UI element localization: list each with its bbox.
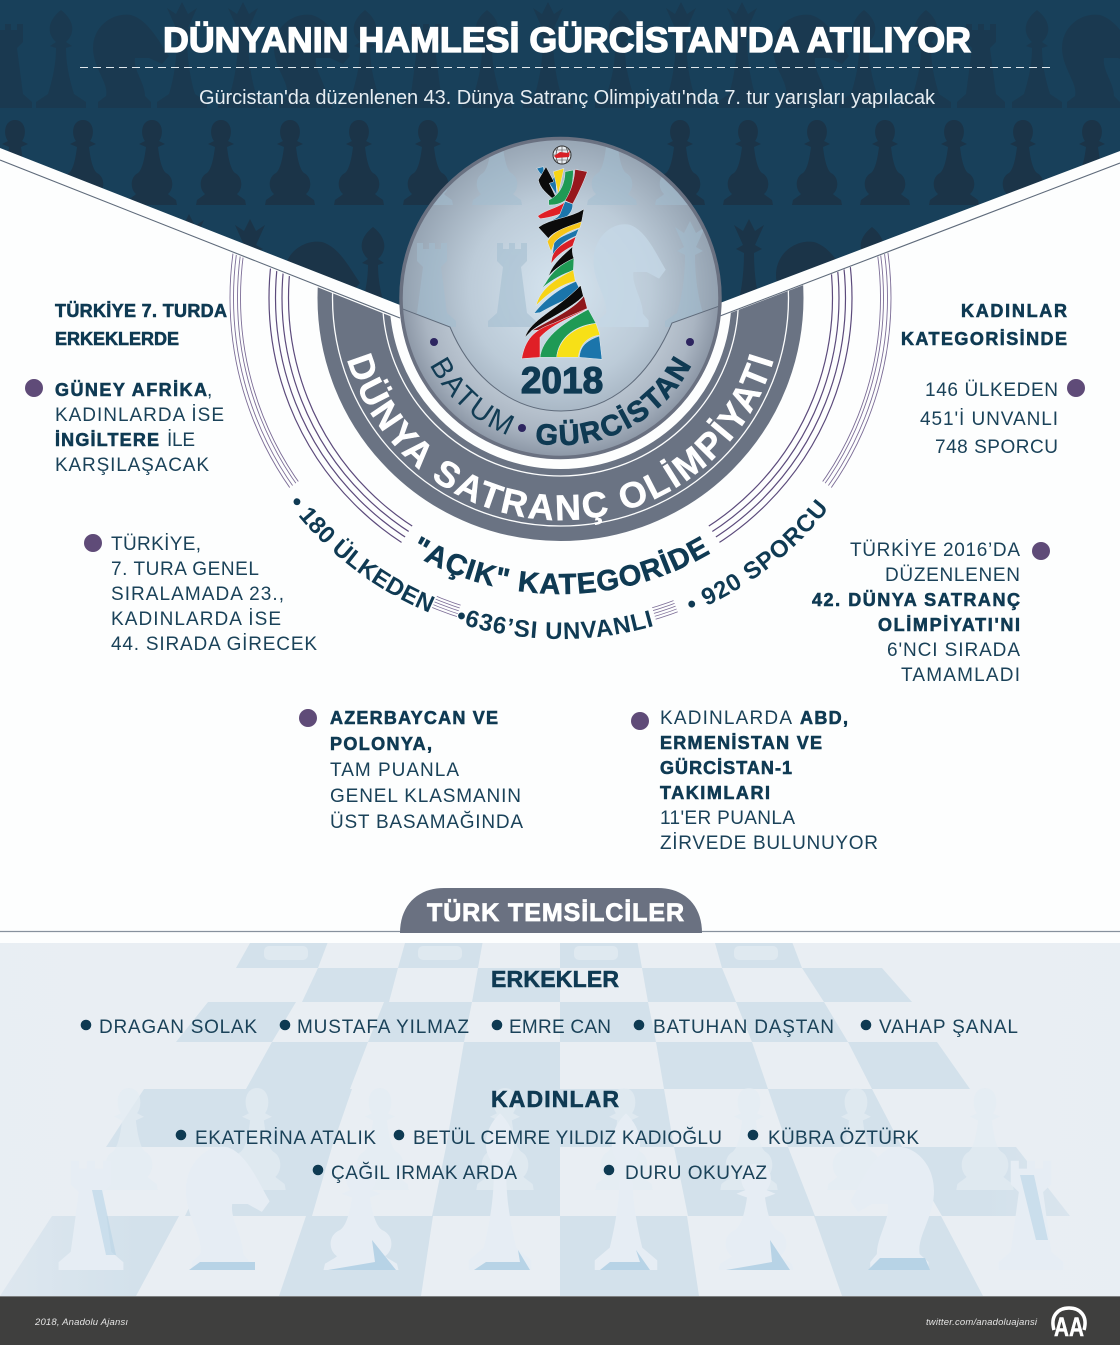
icon: ribbon queen [522,167,602,359]
note: Türkiye 23: TÜRKİYE, [111,534,201,555]
note: Azerbaycan ve Polonya: ÜST BASAMAĞINDA [330,811,523,833]
note: Türkiye 23 [84,534,317,655]
note: Azerbaycan ve Polonya: TAM PUANLA [330,760,459,781]
footer [0,1296,1120,1345]
left heading [55,301,227,349]
note: ABD, Ermenistan, Gürcistan: ABD, [800,708,848,728]
note: Güney Afrika: İLE [167,430,195,451]
note: ABD, Ermenistan, Gürcistan: ZİRVEDE BULUNUYOR [660,833,878,854]
note: Azerbaycan ve Polonya: POLONYA, [330,734,432,754]
Batum Gürcistan curved label [430,338,694,446]
note: Güney Afrika: KADINLARDA İSE [55,405,224,426]
section tab: Türk temsilciler [400,888,702,933]
curved stats: •636’SI UNVANLI [458,610,653,640]
note: women's category stats: 748 SPORCU [935,437,1058,458]
men's list: EMRE CAN [509,1017,611,1038]
subtitle: Gürcistan'da düzenlenen 43. Dünya Satranç Olimpiyatı'nda 7. tur yarışları yapılacak [199,87,936,109]
right heading: KATEGORİSİNDE [901,329,1067,349]
note: Türkiye 23: 7. TURA GENEL [111,559,259,580]
note: 2016 olympiad: 42. DÜNYA SATRANÇ [812,590,1020,610]
emblem circle [399,136,722,460]
note: ABD, Ermenistan, Gürcistan: ERMENİSTAN VE [660,733,822,753]
women's list: ÇAĞIL IRMAK ARDA [331,1162,517,1184]
year 2018: 2018 [521,360,603,401]
right heading: KADINLAR [961,301,1067,321]
note: women's category stats: 146 ÜLKEDEN [925,380,1058,401]
women's list: DURU OKUYAZ [625,1163,767,1184]
note: Güney Afrika: GÜNEY AFRİKA [55,380,207,400]
section tab: Türk temsilciler: TÜRK TEMSİLCİLER [427,898,684,927]
note: 2016 olympiad: TAMAMLADI [901,665,1020,686]
note: ABD, Ermenistan, Gürcistan: KADINLARDA [660,708,792,729]
right heading [901,301,1067,349]
note: Güney Afrika: KARŞILAŞACAK [55,455,209,476]
women's list: BETÜL CEMRE YILDIZ KADIOĞLU [413,1127,722,1149]
note: women's category stats [920,379,1085,458]
gray ring: Dünya Satranç Olimpiyatı: DÜNYA SATRANÇ OLİMPİYATI [347,353,774,525]
women's list: KÜBRA ÖZTÜRK [768,1128,919,1149]
note: ABD, Ermenistan, Gürcistan: GÜRCİSTAN-1 [660,758,792,778]
note: Türkiye 23: SIRALAMADA 23., [111,584,284,605]
heading: Erkekler: ERKEKLER [491,966,619,992]
gray ring: Dünya Satranç Olimpiyatı [318,285,804,541]
note: Türkiye 23: KADINLARDA İSE [111,609,281,630]
men's list: BATUHAN DAŞTAN [653,1017,834,1038]
note: 2016 olympiad: DÜZENLENEN [885,565,1020,586]
note: Azerbaycan ve Polonya: AZERBAYCAN VE [330,708,498,728]
curved stats: • 180 ÜLKEDEN [294,498,435,612]
note: Türkiye 23: 44. SIRADA GİRECEK [111,634,317,655]
curved heading: açık kategoride: "AÇIK" KATEGORİDE [418,536,710,594]
curved stats: • 920 SPORCU [688,499,826,608]
icon: Anadolu Agency logo: AA [1054,1312,1084,1342]
men's list: DRAGAN SOLAK [99,1017,257,1038]
women's list [176,1127,919,1184]
note: ABD, Ermenistan, Gürcistan [631,708,878,854]
footer: twitter.com/anadoluajansi [926,1317,1038,1328]
note: Güney Afrika: İNGİLTERE [55,430,159,450]
note: ABD, Ermenistan, Gürcistan: 11'ER PUANLA [660,808,795,829]
note: 2016 olympiad: 6'NCI SIRADA [887,640,1020,661]
note: Azerbaycan ve Polonya: GENEL KLASMANIN [330,786,521,807]
Batum Gürcistan curved label: BATUM [430,356,514,435]
note: Güney Afrika [25,379,224,476]
Batum Gürcistan curved label: GÜRCİSTAN [536,356,692,446]
heading: Kadınlar: KADINLAR [491,1086,619,1112]
left heading: ERKEKLERDE [55,329,179,349]
title: DÜNYANIN HAMLESİ GÜRCİSTAN'DA ATILIYOR [163,21,971,60]
note: Azerbaycan ve Polonya [299,708,523,833]
curved stats [294,498,826,640]
decorative purple arcs [230,252,892,620]
note: Güney Afrika: , [207,380,212,401]
note: women's category stats: 451'İ UNVANLI [920,409,1058,430]
note: 2016 olympiad [812,540,1050,686]
note: ABD, Ermenistan, Gürcistan: TAKIMLARI [660,783,770,803]
men's list [81,1017,1018,1038]
women's list: EKATERİNA ATALIK [195,1128,376,1149]
icon: FIDE globe [553,146,571,164]
men's list: VAHAP ŞANAL [879,1017,1018,1038]
note: 2016 olympiad: TÜRKİYE 2016’DA [850,540,1020,561]
men's list: MUSTAFA YILMAZ [297,1017,469,1038]
chessboard floor background [0,943,1120,1297]
footer: 2018, Anadolu Ajansı [34,1317,128,1328]
note: 2016 olympiad: OLİMPİYATI'NI [878,615,1020,635]
left heading: TÜRKİYE 7. TURDA [55,301,227,321]
header background with chess pieces [0,0,1120,400]
